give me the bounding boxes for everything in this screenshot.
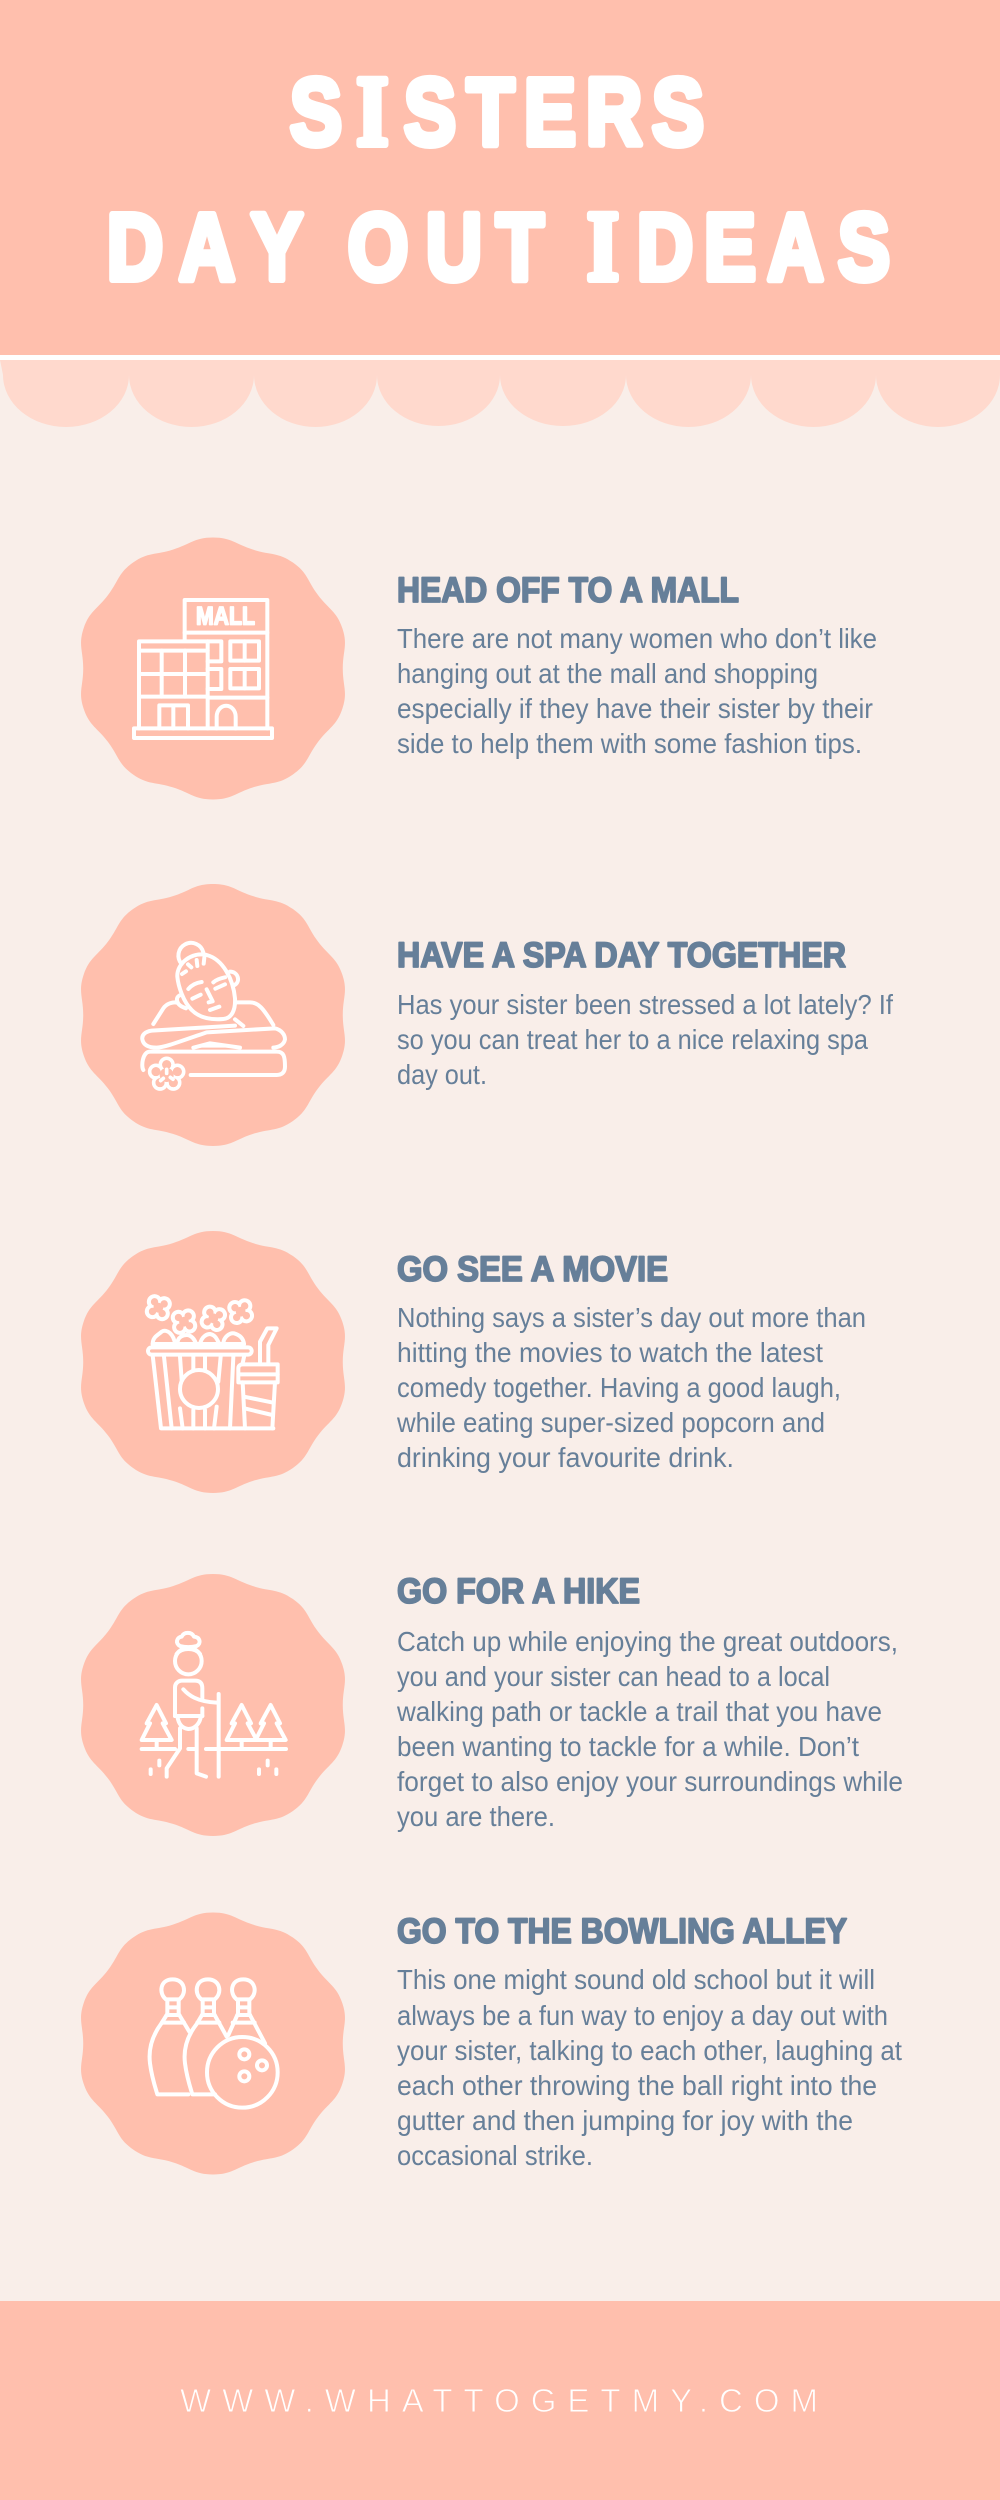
panel: go see a movie <box>81 1231 866 1493</box>
text block: forget to also enjoy your surroundings while <box>397 1766 903 1797</box>
title: A <box>179 194 235 300</box>
heading: HAVE A SPA DAY TOGETHER <box>397 936 846 975</box>
text block: you are there. <box>397 1801 555 1832</box>
icon: popcorn and drink <box>146 1295 278 1428</box>
text block: you and your sister can head to a local <box>397 1661 830 1692</box>
title: I <box>357 56 388 166</box>
title: E <box>704 194 756 300</box>
title: A <box>767 194 824 300</box>
title: S <box>652 59 704 165</box>
text block: Nothing says a sister’s day out more than <box>397 1302 866 1333</box>
text block: day out. <box>397 1059 487 1090</box>
title: Y <box>251 194 303 300</box>
title: T <box>467 59 514 165</box>
title: R <box>586 59 642 165</box>
badge: mall <box>81 538 345 799</box>
title: S <box>838 194 890 300</box>
icon: woman at spa <box>142 943 285 1089</box>
badge: movie <box>81 1231 345 1493</box>
badge: hike <box>81 1574 345 1836</box>
panel: go for a hike <box>81 1572 903 1836</box>
text block: each other throwing the ball right into the <box>397 2070 877 2101</box>
header band <box>0 0 1000 427</box>
panel: have a spa day together <box>81 884 893 1146</box>
title <box>107 56 890 301</box>
text block <box>397 623 877 759</box>
badge: spa <box>81 884 345 1146</box>
text block: This one might sound old school but it will <box>397 1964 875 1995</box>
icon: bowling pins and ball <box>150 1979 278 2108</box>
title: O <box>348 194 408 300</box>
scalloped awning <box>0 360 1000 427</box>
title: D <box>637 194 693 300</box>
icon: hiker and trees <box>142 1633 286 1777</box>
text block: Has your sister been stressed a lot lately? If <box>397 989 893 1020</box>
text block: especially if they have their sister by their <box>397 693 873 724</box>
heading: GO SEE A MOVIE <box>397 1250 668 1289</box>
text block: hanging out at the mall and shopping <box>397 658 818 689</box>
text block: drinking your favourite drink. <box>397 1442 734 1473</box>
text block: gutter and then jumping for joy with the <box>397 2105 853 2136</box>
badge: bowling <box>81 1913 345 2174</box>
title: E <box>524 59 576 165</box>
panel: go to the bowling alley <box>81 1912 902 2174</box>
title: T <box>496 194 544 300</box>
footer band <box>0 2301 1000 2500</box>
text block <box>396 1626 903 1832</box>
title: S <box>290 59 342 165</box>
title: I <box>587 191 619 301</box>
panel: head off to a mall <box>81 538 877 799</box>
icon: mall building: MALL <box>196 604 255 631</box>
text block: so you can treat her to a nice relaxing spa <box>397 1024 869 1055</box>
text block: side to help them with some fashion tips. <box>397 728 862 759</box>
title: S <box>404 59 456 165</box>
heading: GO TO THE BOWLING ALLEY <box>397 1912 847 1951</box>
text block: your sister, talking to each other, laughing at <box>397 2035 902 2066</box>
text block: comedy together. Having a good laugh, <box>397 1372 841 1403</box>
text block: always be a fun way to enjoy a day out with <box>397 2000 888 2031</box>
text block: hitting the movies to watch the latest <box>397 1337 823 1368</box>
text block: Catch up while enjoying the great outdoors, <box>397 1626 898 1657</box>
text block: while eating super-sized popcorn and <box>396 1407 825 1438</box>
text block <box>397 989 893 1090</box>
text block <box>397 1964 902 2171</box>
text block: walking path or tackle a trail that you have <box>396 1696 882 1727</box>
heading: GO FOR A HIKE <box>397 1572 640 1611</box>
text block: There are not many women who don’t like <box>397 623 877 654</box>
text block: been wanting to tackle for a while. Don’t <box>397 1731 859 1762</box>
text block: occasional strike. <box>397 2140 593 2171</box>
title: D <box>107 194 163 300</box>
title: U <box>426 194 482 300</box>
website url: WWW.WHATTOGETMY.COM <box>180 2382 818 2419</box>
icon: mall building <box>134 600 272 738</box>
heading: HEAD OFF TO A MALL <box>397 571 739 610</box>
text block <box>396 1302 866 1473</box>
